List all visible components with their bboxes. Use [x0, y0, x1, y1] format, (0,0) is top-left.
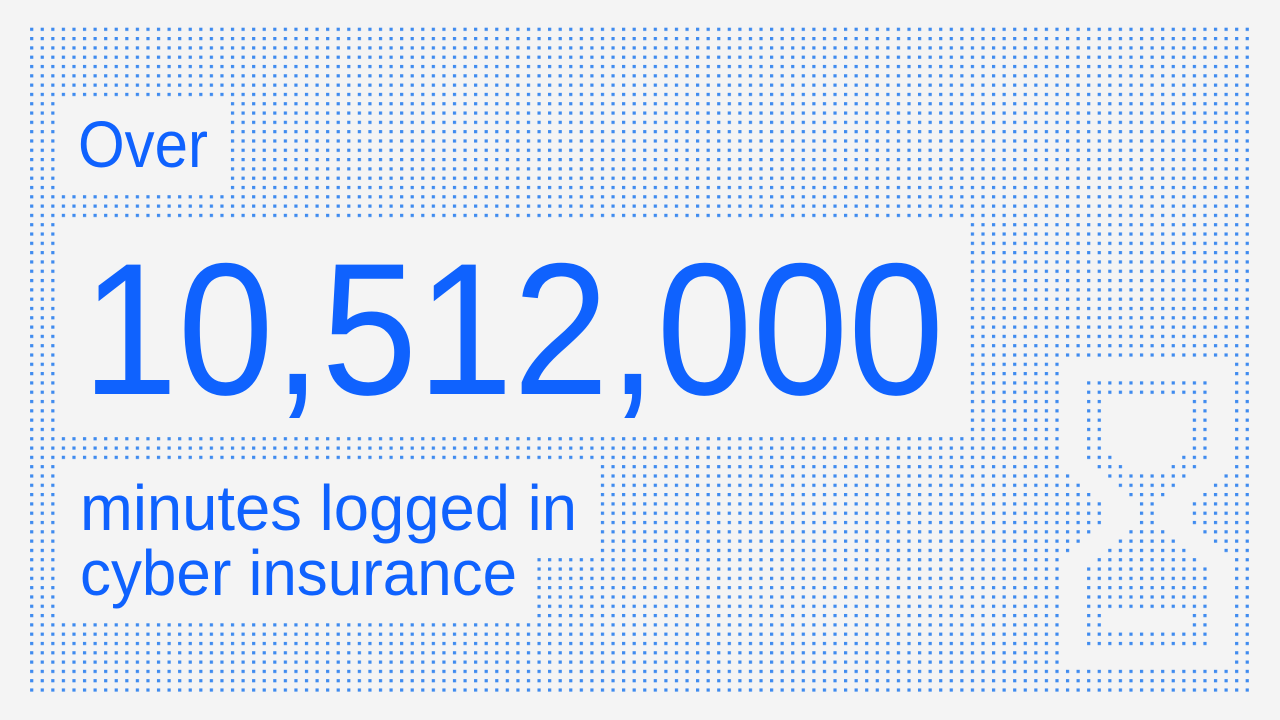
icon: dotted hourglass	[1062, 359, 1232, 667]
panel: description	[57, 462, 597, 620]
big number: 10,512,000	[82, 224, 944, 434]
heading: Over: Over	[78, 107, 208, 181]
panel: big number	[57, 220, 967, 434]
description text: cyber insurance	[80, 537, 517, 609]
panel: over	[57, 99, 227, 192]
description text	[80, 472, 577, 609]
description text: minutes logged in	[80, 472, 577, 544]
